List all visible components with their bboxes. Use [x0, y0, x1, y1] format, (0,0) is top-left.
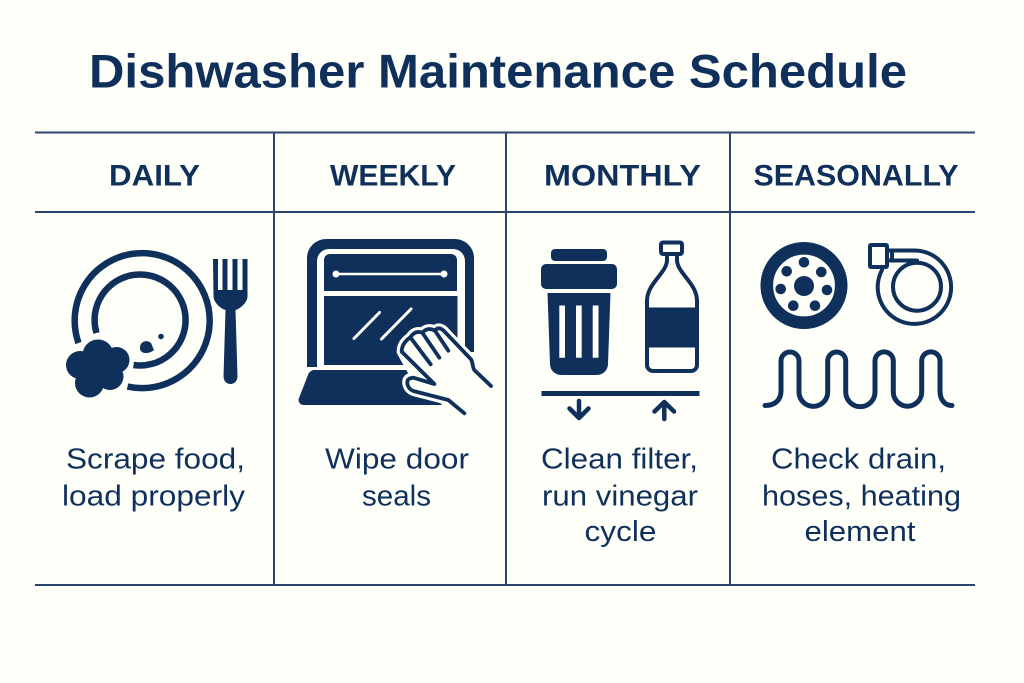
heading: weekly: WEEKLY — [330, 160, 456, 192]
column: monthly — [541, 160, 701, 548]
description: weekly: Wipe door — [325, 444, 469, 476]
description: seasonally: Check drain, — [771, 444, 946, 476]
icon: plate, food scraps and fork — [66, 253, 248, 398]
description: monthly — [541, 444, 698, 548]
title: Dishwasher Maintenance Schedule — [89, 46, 907, 98]
icon: filter, vinegar bottle and arrows — [541, 242, 700, 419]
description: seasonally — [762, 444, 961, 548]
icon: dishwasher door with wiping hand — [299, 239, 491, 413]
description: daily — [62, 444, 246, 512]
table grid — [35, 132, 975, 585]
icon: drain, hose and heating element — [765, 245, 952, 407]
description: monthly: Clean filter, — [541, 444, 698, 476]
heading: monthly: MONTHLY — [544, 160, 701, 192]
description: monthly: cycle — [584, 516, 656, 548]
description: weekly — [325, 444, 469, 512]
description: daily: Scrape food, — [66, 444, 245, 476]
description: daily: load properly — [62, 480, 246, 512]
column: daily — [62, 160, 248, 512]
column: seasonally — [754, 160, 961, 548]
description: seasonally: hoses, heating — [762, 480, 961, 512]
description: monthly: run vinegar — [542, 480, 698, 512]
heading: daily: DAILY — [109, 160, 200, 192]
description: weekly: seals — [362, 480, 431, 512]
column: weekly — [299, 160, 491, 512]
description: seasonally: element — [804, 516, 916, 548]
heading: seasonally: SEASONALLY — [754, 160, 958, 192]
